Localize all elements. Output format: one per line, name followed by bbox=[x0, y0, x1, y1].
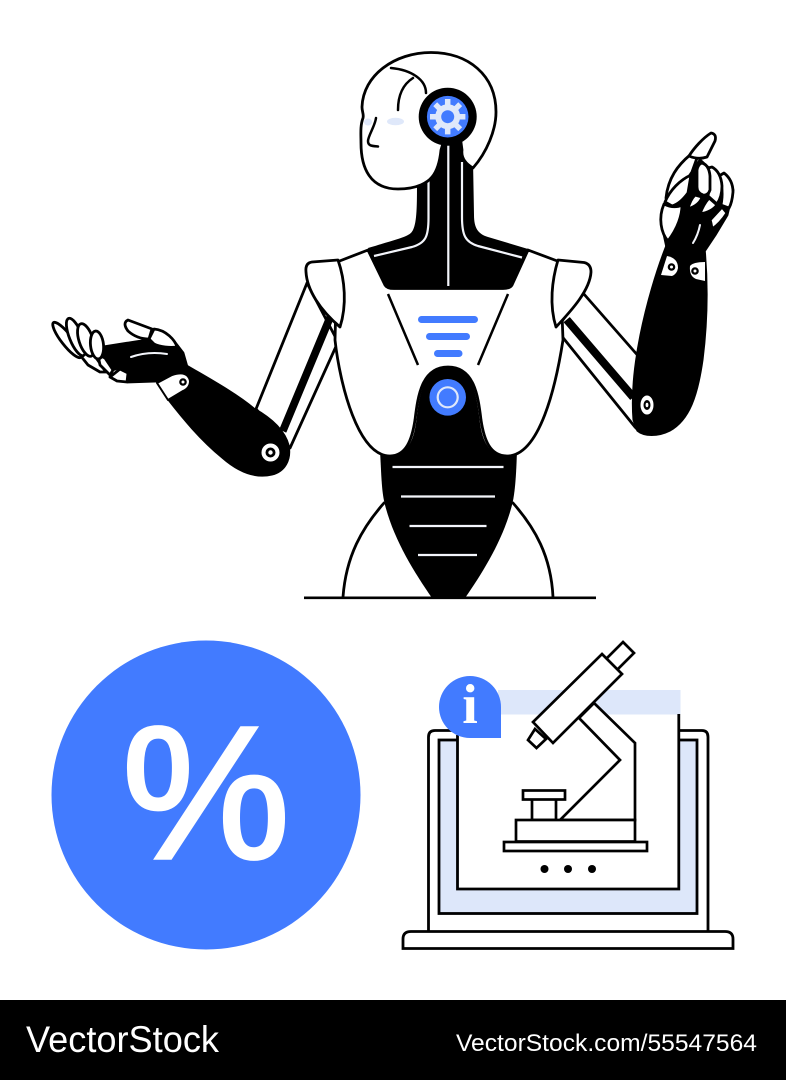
laptop base bbox=[403, 932, 733, 948]
abdomen stripes bbox=[392, 467, 504, 555]
ear gear bbox=[419, 88, 477, 146]
stage post bbox=[532, 799, 556, 820]
laptop screen bbox=[439, 740, 697, 914]
chest lines bbox=[388, 294, 508, 365]
wrist plates bbox=[661, 256, 678, 276]
right hand bbox=[661, 133, 733, 250]
thumb bbox=[149, 329, 177, 347]
robot torso armour bbox=[335, 250, 563, 456]
footer brand: VectorStock bbox=[26, 1019, 219, 1060]
chest core bbox=[401, 368, 495, 453]
robot right upper arm bbox=[556, 293, 640, 430]
curled fingers bbox=[719, 173, 733, 208]
percent badge bbox=[52, 640, 360, 950]
stage bbox=[523, 790, 565, 800]
left forearm bbox=[157, 364, 290, 476]
elbow joint bbox=[640, 396, 654, 414]
robot illustration bbox=[49, 52, 733, 598]
palm bbox=[103, 340, 187, 382]
robot abdomen bbox=[380, 450, 517, 598]
footer bar bbox=[0, 1000, 786, 1080]
eye highlights bbox=[387, 118, 404, 125]
info bubble bbox=[439, 674, 501, 738]
palm highlight bbox=[693, 225, 700, 243]
neck lines bbox=[374, 144, 522, 286]
fingers bbox=[49, 319, 85, 361]
robot neck bbox=[368, 130, 528, 288]
tube bbox=[533, 654, 622, 743]
lower finger segments bbox=[80, 352, 106, 372]
microscope bbox=[504, 642, 647, 851]
footer image id: VectorStock.com/55547564 bbox=[456, 1030, 757, 1057]
robot head bbox=[361, 52, 496, 189]
right shoulder cap bbox=[552, 260, 591, 327]
info glyph: i bbox=[462, 674, 478, 736]
robot left upper arm bbox=[256, 283, 338, 448]
right forearm bbox=[632, 243, 707, 436]
thumb bbox=[665, 175, 691, 206]
elbow joint bbox=[262, 444, 280, 462]
palm highlight bbox=[131, 353, 167, 357]
palm bbox=[662, 160, 733, 250]
laptop lid bbox=[428, 730, 708, 932]
base block bbox=[516, 820, 635, 842]
left hand bbox=[49, 316, 187, 382]
robot legs bbox=[343, 503, 553, 597]
eyepiece bbox=[606, 642, 634, 670]
document panel bbox=[458, 690, 680, 889]
arm bbox=[560, 703, 635, 820]
ground line bbox=[304, 596, 596, 599]
percent sign: % bbox=[122, 688, 290, 899]
laptop with microscope bbox=[403, 642, 733, 948]
objective bbox=[528, 729, 546, 748]
left shoulder cap bbox=[306, 260, 344, 327]
foot bbox=[504, 842, 647, 851]
head seams bbox=[368, 68, 426, 146]
chest bars bbox=[418, 316, 478, 357]
pagination dots bbox=[540, 865, 596, 873]
wrist plate bbox=[157, 373, 190, 400]
index finger bbox=[666, 155, 697, 198]
